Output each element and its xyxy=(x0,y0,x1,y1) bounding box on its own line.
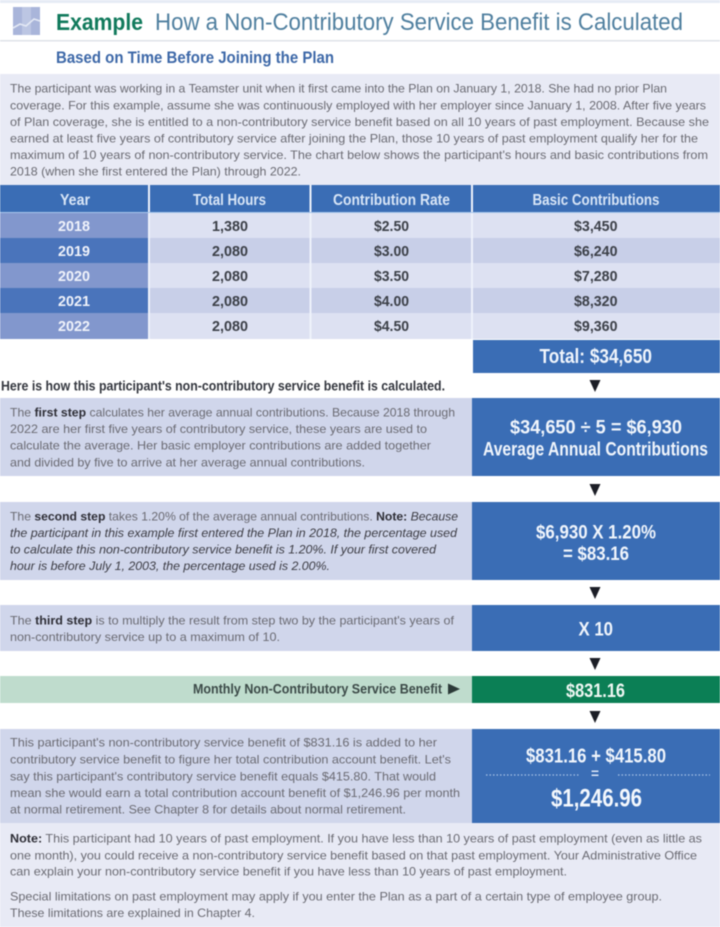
row 2022: $9,360 xyxy=(574,318,618,335)
panel: notes: can explain your non-contributory service benefit if you have less than 10 years of past employment. xyxy=(10,866,567,878)
band: monthly benefit label xyxy=(0,676,472,703)
row 2021 xyxy=(0,288,720,313)
panel: first step: and divided by five to arrive at her average annual contributions. xyxy=(10,456,365,470)
title: Example xyxy=(56,9,143,35)
box: total benefit calculation xyxy=(472,729,720,823)
row 2020: 2020 xyxy=(58,269,90,285)
panel: third step: non-contributory service up to a maximum of 10. xyxy=(10,631,280,644)
box: total benefit calculation: $1,246.96 xyxy=(551,784,642,812)
header xyxy=(13,7,683,67)
row 2022: 2,080 xyxy=(212,318,248,335)
panel: total benefit explanation: mean she would earn a total contribution account benefit of $1,246.96 per month xyxy=(10,787,460,800)
subheading: Based on Time Before Joining the Plan xyxy=(56,48,334,67)
total box: Total: $34,650 xyxy=(540,346,652,368)
table header: Basic Contributions xyxy=(532,192,660,209)
row 2019: 2019 xyxy=(58,244,90,260)
panel: third step: The third step is to multiply the result from step two by the participant's years of xyxy=(10,614,455,628)
row 2021: 2021 xyxy=(58,294,90,310)
box: second step calculation: = $83.16 xyxy=(563,543,629,565)
arrow xyxy=(590,658,600,670)
box: third step calculation xyxy=(472,605,720,651)
panel: total benefit explanation xyxy=(0,729,472,823)
row 2020: $7,280 xyxy=(574,268,618,285)
row 2022 xyxy=(0,313,720,339)
panel: notes: one month), you could receive a non-contributory service benefit based on that past employment. Your Administrative Office xyxy=(10,850,697,862)
row 2022: 2022 xyxy=(58,319,90,335)
table header xyxy=(0,185,720,339)
panel: intro: 2018 (when she first entered the Plan) through 2022. xyxy=(10,166,301,178)
box: monthly benefit amount xyxy=(472,676,720,703)
band: monthly benefit label: Monthly Non-Contributory Service Benefit xyxy=(193,680,442,696)
row 2018: 2018 xyxy=(58,219,90,235)
icon: chart xyxy=(13,7,40,35)
row 2022: $4.50 xyxy=(374,318,409,335)
panel: intro xyxy=(0,74,720,185)
row 2019: $6,240 xyxy=(574,243,618,260)
table xyxy=(0,185,720,339)
row 2020: $3.50 xyxy=(374,268,409,285)
panel: total benefit explanation: at normal retirement. See Chapter 8 for details about normal retirement. xyxy=(10,804,406,816)
total box xyxy=(473,340,720,373)
panel: notes: Special limitations on past employment may apply if you enter the Plan as a part of a certain type of employee group. xyxy=(10,890,662,904)
box: second step calculation: $6,930 X 1.20% xyxy=(536,522,656,544)
row 2021: $8,320 xyxy=(574,293,618,310)
panel: total benefit explanation: This participant's non-contributory service benefit of $831.16 is added to her xyxy=(10,736,437,750)
row 2021: 2,080 xyxy=(212,293,248,310)
intro sentence: Here is how this participant's non-contributory service benefit is calculated. xyxy=(1,378,445,394)
box: first step calculation xyxy=(472,398,720,476)
panel: notes xyxy=(0,823,720,927)
arrow xyxy=(590,711,600,723)
panel: first step: The first step calculates her average annual contributions. Because 2018 through xyxy=(10,406,455,420)
panel: first step xyxy=(0,398,472,476)
title text: How a Non-Contributory Service Benefit is Calculated xyxy=(155,9,683,36)
table header: Total Hours xyxy=(193,192,266,209)
row 2018 xyxy=(0,213,720,238)
row 2018: $2.50 xyxy=(374,218,409,235)
table header: Contribution Rate xyxy=(333,192,450,209)
arrow xyxy=(590,380,600,392)
row 2019: $3.00 xyxy=(374,243,409,260)
panel: second step: to calculate this non-contributory service benefit is 1.20%. If your first covered xyxy=(10,544,437,556)
row 2019: 2,080 xyxy=(212,243,248,260)
panel: first step: 2022 are her first five years of contributory service, these years are used to xyxy=(10,423,428,436)
panel: notes: These limitations are explained in Chapter 4. xyxy=(10,907,255,920)
panel: intro: of Plan coverage, she is entitled to a non-contributory service benefit based on all 10 years of past employment. Because she xyxy=(10,116,709,129)
panel: intro: maximum of 10 years of non-contributory service. The chart below shows the participant's hours and basic contributions from xyxy=(10,149,708,162)
panel: intro: coverage. For this example, assume she was continuously employed with her employer since January 1, 2008. After five years xyxy=(10,100,706,112)
row 2018: 1,380 xyxy=(212,218,248,235)
box: monthly benefit amount: $831.16 xyxy=(566,681,625,702)
table header: Year xyxy=(60,192,90,209)
row 2020: 2,080 xyxy=(212,268,248,285)
box: total benefit calculation: $831.16 + $415.80 xyxy=(526,746,666,768)
row 2020 xyxy=(0,263,720,288)
panel: first step: calculate the average. Her basic employer contributions are added together xyxy=(10,440,431,452)
panel: third step xyxy=(0,605,472,651)
row 2018: $3,450 xyxy=(574,218,618,235)
panel: second step xyxy=(0,502,472,580)
panel: notes: Note: This participant had 10 years of past employment. If you have less than 10 years of past employment (even as little as xyxy=(10,832,702,846)
box: first step calculation: $34,650 ÷ 5 = $6,930 xyxy=(510,416,682,438)
arrow xyxy=(590,484,600,496)
panel: second step: the participant in this example first entered the Plan in 2018, the percentage used xyxy=(10,527,458,540)
panel: intro: The participant was working in a Teamster unit when it first came into the Plan on January 1, 2018. She had no prior Plan xyxy=(10,82,667,96)
panel: total benefit explanation: say this participant's contributory service benefit equals $415.80. That would xyxy=(10,770,436,784)
panel: intro: earned at least five years of contributory service after joining the Plan, those 10 years of past employment qualify her for the xyxy=(10,132,698,146)
box: third step calculation: X 10 xyxy=(578,620,613,640)
box: total benefit calculation: = xyxy=(591,765,599,781)
row 2019 xyxy=(0,238,720,263)
box: second step calculation xyxy=(472,502,720,580)
arrow xyxy=(590,587,600,599)
panel: second step: hour is before July 1, 2003, the percentage used is 2.00%. xyxy=(10,560,330,573)
panel: second step: The second step takes 1.20% of the average annual contributions. Note: Because xyxy=(10,510,459,524)
panel: total benefit explanation: contributory service benefit to figure her total contribution account benefit. Let's xyxy=(10,754,451,766)
row 2021: $4.00 xyxy=(374,293,409,310)
